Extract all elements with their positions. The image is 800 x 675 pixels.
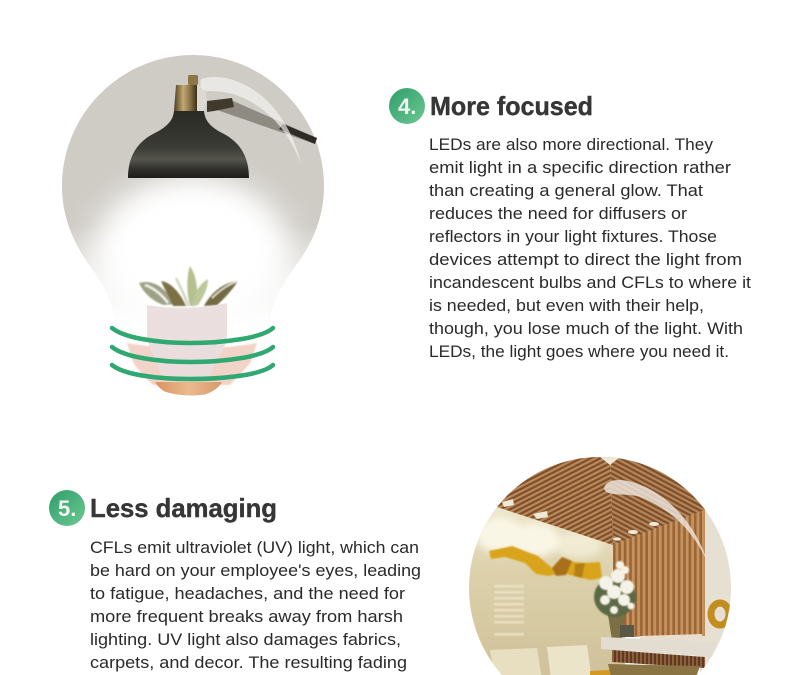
ceiling spot lights [502,457,659,541]
plant pot [147,303,227,377]
lower bulb white fade [74,238,312,396]
paragraph: less damaging: lighting. UV light also damages fabrics, [90,631,401,649]
lamp arm [207,98,317,144]
bulb highlight swoosh [200,77,301,165]
paragraph: more focused: is needed, but even with their help, [429,297,704,315]
heading 4 [389,88,593,124]
paragraph: less damaging: more frequent breaks away from harsh [90,608,403,626]
ceiling slats [497,457,705,545]
paragraph: less damaging: to fatigue, headaches, and the need for [90,585,406,603]
bulb highlight swoosh [604,480,708,563]
heading 5: Less damaging [90,493,277,523]
paragraph: more focused: LEDs, the light goes where you need it. [429,343,729,361]
badge 5 [49,490,85,526]
paragraph: more focused: incandescent bulbs and CFLs to where it [429,274,751,292]
badge 5: 5. [58,496,76,521]
wall light patches [476,517,602,558]
heading 5 [49,490,277,526]
paragraph: more focused: though, you lose much of the light. With [429,320,743,338]
armchairs [490,645,700,675]
right white wall [700,504,731,672]
paragraph: more focused: reflectors in your light fixtures. Those [429,228,717,246]
paragraph: less damaging: CFLs emit ultraviolet (UV) light, which can [90,539,419,557]
bulb photo backdrop [55,50,330,400]
green rings [112,328,273,379]
white light glow [82,177,302,292]
paragraph: less damaging: carpets, and decor. The resulting fading [90,654,407,672]
lamp shade [128,111,249,178]
gold ribbon sculpture [489,546,602,580]
paragraph: more focused: emit light in a specific direction rather [429,159,732,177]
paragraph: less damaging: be hard on your employee's eyes, leading [90,562,421,580]
wooden base [155,382,222,396]
shelf and table [601,625,717,668]
blinds shadow [494,585,524,636]
flower bouquet [594,561,636,640]
left wall [465,450,625,675]
paragraph: more focused: LEDs are also more directional. They [429,136,714,154]
plant [139,266,238,306]
paragraph: more focused: than creating a general glow. That [429,182,703,200]
heading 4: More focused [430,91,593,121]
paragraph: less damaging [90,539,421,672]
paragraph: more focused: devices attempt to direct the light from [429,251,742,269]
glow core [120,193,264,297]
badge 4 [389,88,425,124]
badge 4: 4. [398,94,416,119]
bulb-shaped lamp photo [55,50,330,400]
lamp brass neck [174,75,207,111]
circular room photo [469,457,731,675]
wood slat wall [613,510,705,637]
pink pot reflection band [127,343,257,385]
paragraph: more focused: reduces the need for diffusers or [429,205,688,223]
gold ring ornament [711,603,729,625]
paragraph: more focused [429,136,751,361]
